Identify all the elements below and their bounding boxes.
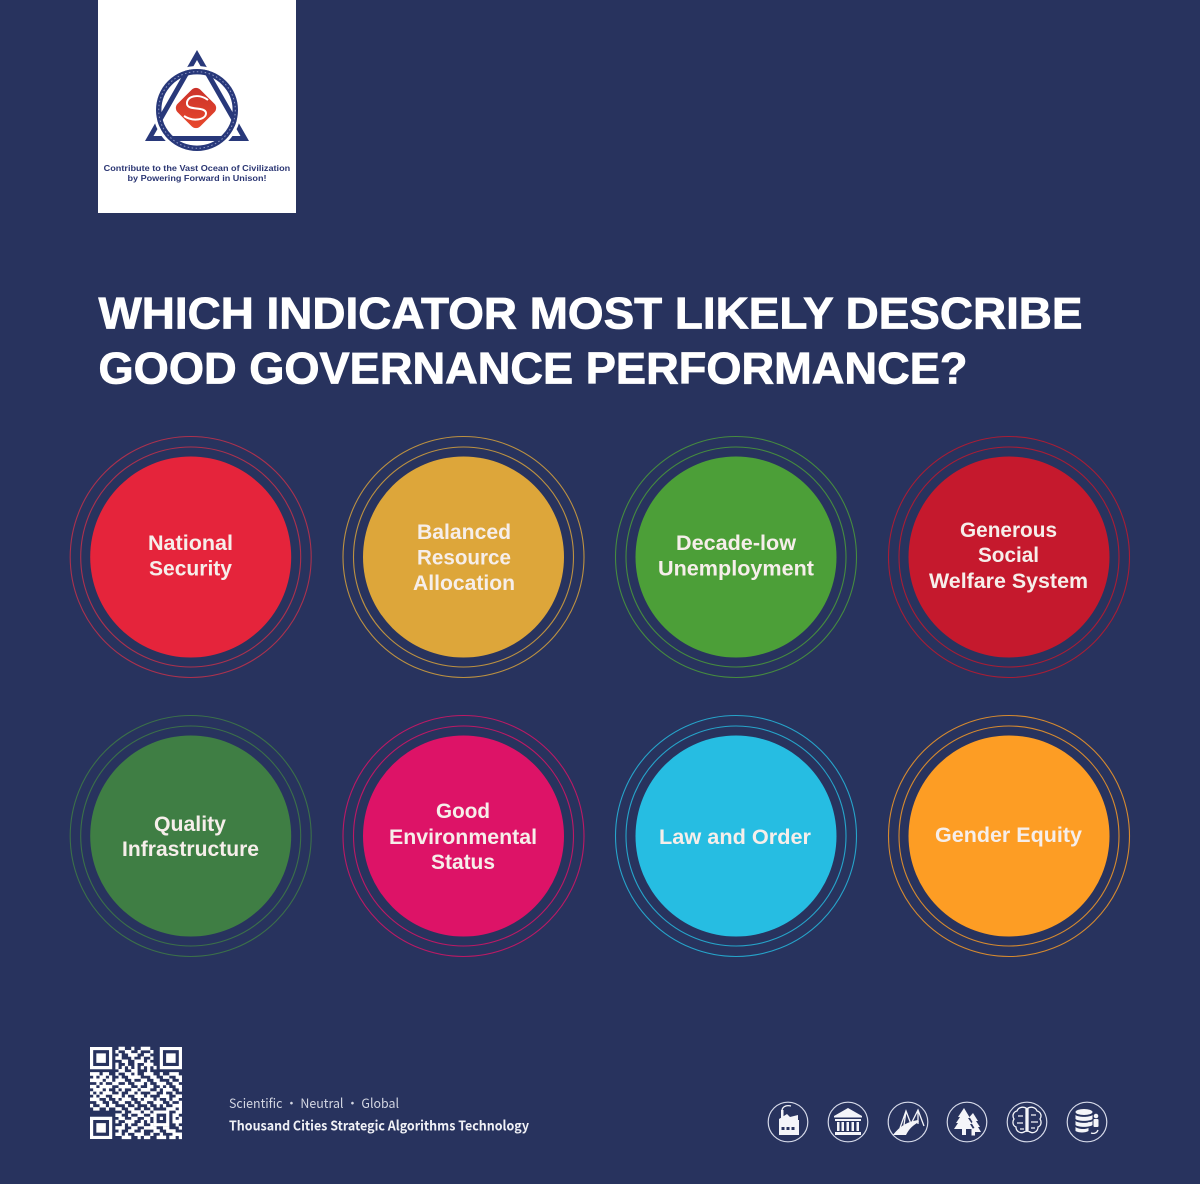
footer text bbox=[229, 1093, 529, 1134]
icon: government building bbox=[828, 1102, 868, 1142]
indicator: Balanced Resource Allocation: Allocation bbox=[413, 572, 515, 595]
indicator: Quality Infrastructure bbox=[70, 716, 311, 956]
indicator: Good Environmental Status: Status bbox=[431, 851, 495, 874]
logo tagline bbox=[104, 164, 290, 183]
logo panel bbox=[98, 0, 296, 213]
icon: factory bbox=[768, 1102, 808, 1142]
footer text: Thousand Cities Strategic Algorithms Technology bbox=[229, 1114, 529, 1134]
icon: trees bbox=[947, 1102, 987, 1142]
indicator: Decade-low Unemployment bbox=[616, 436, 856, 678]
indicator: Generous Social Welfare System: Welfare System bbox=[929, 570, 1088, 593]
icon: bridge bbox=[888, 1102, 928, 1142]
indicator: Good Environmental Status bbox=[343, 716, 584, 956]
logo emblem bbox=[145, 50, 249, 152]
footer text: Scientific · Neutral · Global bbox=[229, 1093, 399, 1112]
indicator: Law and Order: Law and Order bbox=[659, 826, 811, 849]
indicator: Balanced Resource Allocation: Resource bbox=[417, 546, 511, 570]
indicator: Generous Social Welfare System bbox=[888, 436, 1130, 678]
logo tagline: Contribute to the Vast Ocean of Civilization bbox=[104, 164, 290, 173]
indicator: National Security: National bbox=[148, 532, 233, 555]
indicator: Decade-low Unemployment: Unemployment bbox=[658, 558, 814, 580]
icon: brain bbox=[1007, 1102, 1047, 1142]
indicator: Quality Infrastructure: Quality bbox=[154, 813, 226, 836]
indicator: Generous Social Welfare System: Generous bbox=[960, 519, 1057, 542]
indicator: National Security: Security bbox=[149, 558, 232, 580]
icon: data and people bbox=[1067, 1102, 1107, 1142]
logo tagline: by Powering Forward in Unison! bbox=[128, 174, 266, 183]
indicator: Balanced Resource Allocation: Balanced bbox=[417, 521, 511, 544]
indicator: Decade-low Unemployment: Decade-low bbox=[676, 532, 797, 555]
indicator: Quality Infrastructure: Infrastructure bbox=[122, 838, 259, 861]
QR code bbox=[90, 1049, 182, 1137]
title: GOOD GOVERNANCE PERFORMANCE? bbox=[98, 344, 968, 394]
indicator: Generous Social Welfare System: Social bbox=[978, 544, 1039, 567]
indicator: National Security bbox=[70, 436, 311, 678]
indicator: Balanced Resource Allocation bbox=[343, 436, 584, 678]
title bbox=[98, 290, 1082, 394]
title: WHICH INDICATOR MOST LIKELY DESCRIBE bbox=[98, 290, 1082, 338]
indicator: Good Environmental Status: Environmental bbox=[389, 826, 537, 849]
indicator: Good Environmental Status: Good bbox=[436, 800, 490, 823]
indicator: Gender Equity: Gender Equity bbox=[935, 824, 1082, 847]
indicator: Gender Equity bbox=[888, 716, 1130, 956]
indicator: Law and Order bbox=[616, 716, 856, 956]
